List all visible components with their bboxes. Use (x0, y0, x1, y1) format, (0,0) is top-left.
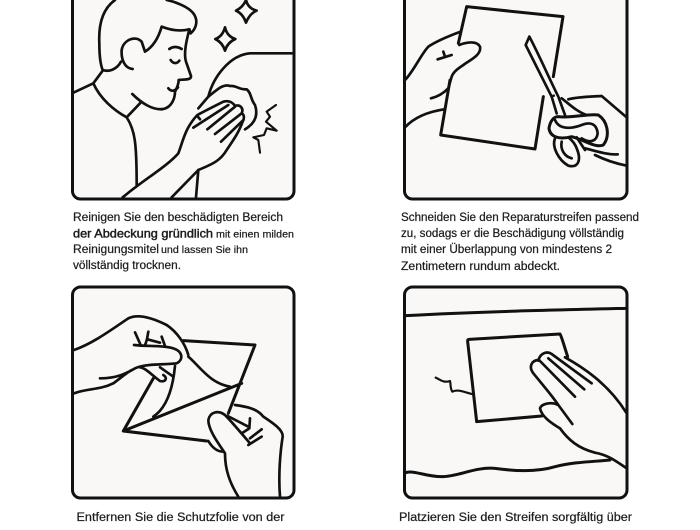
text: step 2 instructions (401, 212, 639, 273)
icon: sparkle small (215, 27, 235, 51)
text: step 1 instructions: völlständig trocknen. (73, 260, 181, 272)
illustration: placing strip on cover (406, 308, 627, 477)
icon: sparkle large (236, 0, 257, 23)
text: step 2 instructions: mit einer Überlappung von mindestens 2 (401, 244, 612, 256)
text: step 3 instructions: Entfernen Sie die Schutzfolie von der (76, 512, 285, 524)
illustration: peeling protective film (74, 316, 283, 497)
text: step 2 instructions: zu, sodags er die Beschädigung völlständig (401, 228, 624, 240)
text: step 1 instructions: Reinigen Sie den beschädigten Bereich (73, 212, 283, 224)
panel: step 3 peeling (72, 287, 294, 498)
illustration: man wiping cover (73, 0, 292, 197)
text: step 2 instructions: Zentimetern rundum abdeckt. (401, 261, 560, 273)
text: step 1 instructions: mit einen milden (216, 230, 294, 240)
panel: step 4 placing (404, 287, 627, 498)
illustration: cutting strip with scissors (405, 7, 627, 166)
text: step 2 instructions: Schneiden Sie den Reparaturstreifen passend (401, 212, 639, 224)
text: step 1 instructions: der Abdeckung gründlich (73, 226, 213, 240)
text: step 4 instructions: Platzieren Sie den Streifen sorgfältig über (399, 512, 632, 524)
text: step 1 instructions: und lassen Sie ihn (161, 244, 248, 256)
text: step 1 instructions (73, 212, 294, 272)
text: step 1 instructions: Reinigungsmitel (73, 244, 159, 256)
panel: step 2 cutting (404, 0, 627, 199)
panel: step 1 cleaning (72, 0, 294, 199)
